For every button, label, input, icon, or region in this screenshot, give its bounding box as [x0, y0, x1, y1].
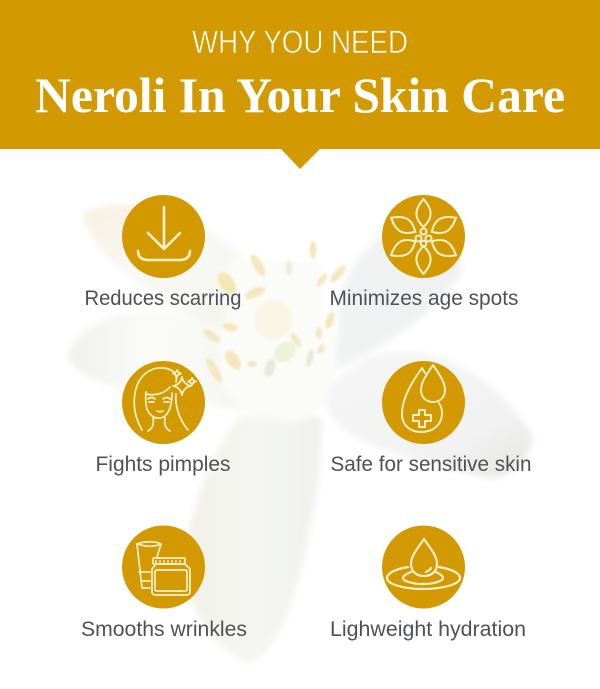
title line two: Neroli In Your Skin Care: [35, 67, 565, 123]
item: fights pimples: [96, 361, 230, 476]
icon: woman's face with sparkles: [122, 361, 205, 444]
icon: six petal flower: [382, 195, 465, 278]
label: Reduces scarring: [84, 286, 242, 310]
icon: water drop with ripples: [382, 526, 465, 608]
icon: download arrow: [122, 195, 205, 278]
icon: drops with medical cross: [382, 361, 465, 444]
label: Fights pimples: [96, 452, 230, 476]
label: Safe for sensitive skin: [330, 452, 532, 476]
stamens: [202, 241, 348, 384]
item: lightweight hydration: [330, 526, 526, 641]
label: Lighweight hydration: [330, 617, 526, 641]
item: smooths wrinkles: [81, 526, 247, 641]
header banner: [0, 0, 600, 169]
title line one: WHY YOU NEED: [192, 24, 408, 60]
banner pointer arrow: [281, 149, 320, 169]
label: Minimizes age spots: [330, 286, 518, 310]
item: safe for sensitive skin: [330, 361, 532, 476]
item: minimizes age spots: [330, 195, 518, 310]
neroli flower background photo: [67, 205, 533, 663]
icon: cream tube and jar: [122, 526, 205, 608]
item: reduces scarring: [84, 195, 242, 310]
label: Smooths wrinkles: [81, 617, 247, 641]
